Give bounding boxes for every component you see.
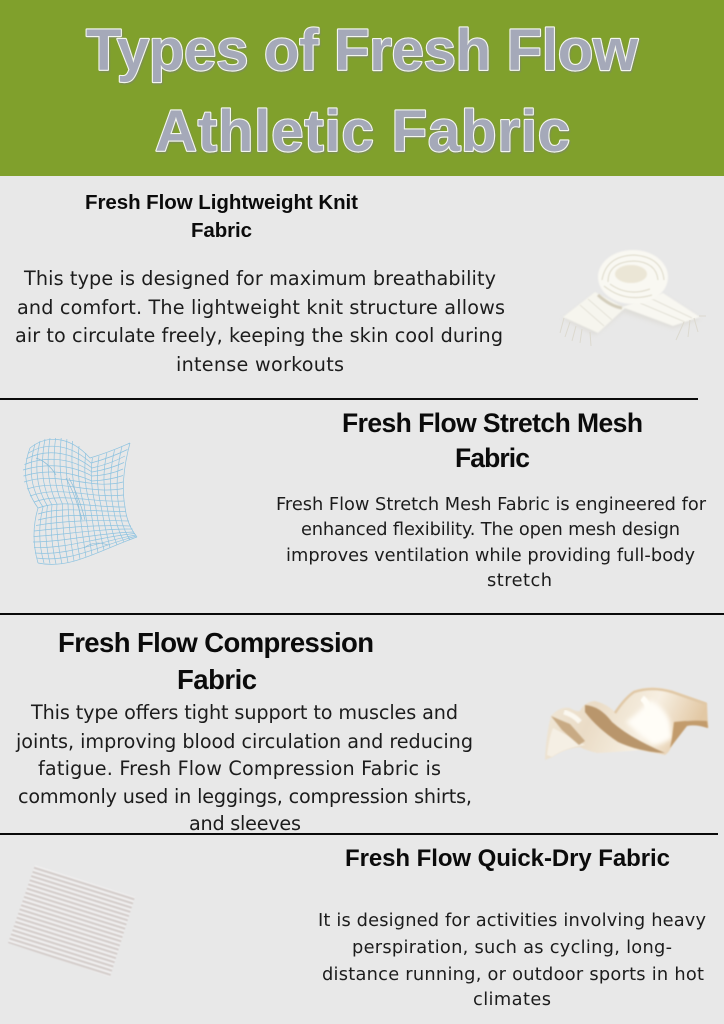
title: Types of Fresh Flow (86, 18, 639, 83)
text: quick-dry description: perspiration, such as cycling, long- (352, 937, 672, 958)
text: compression description (15, 701, 473, 835)
text: lightweight knit description: intense workouts (176, 353, 344, 376)
text: stretch mesh description: Fresh Flow Stretch Mesh Fabric is engineered for (276, 494, 707, 515)
text: quick-dry description: climates (473, 989, 551, 1010)
text: lightweight knit description: This type is designed for maximum breathability (23, 267, 496, 290)
text: lightweight knit description (15, 267, 505, 376)
icon: white knit scarf (560, 250, 706, 346)
divider line 2 (0, 613, 724, 615)
icon: flowing beige silk (545, 688, 708, 760)
panel: compression (15, 627, 708, 835)
divider line 3 (0, 833, 718, 835)
panel: stretch mesh (23, 408, 707, 591)
text: stretch mesh description (276, 494, 707, 591)
divider line 1 (0, 398, 698, 400)
heading: lightweight knit: Fresh Flow Lightweight Knit (85, 191, 358, 214)
heading: stretch mesh (342, 408, 643, 473)
icon: warped blue mesh (23, 438, 137, 564)
icon: checked fabric swatch (8, 865, 135, 977)
text: stretch mesh description: enhanced flexibility. The open mesh design (301, 519, 680, 540)
panel: lightweight knit (15, 191, 706, 376)
panel: quick-dry (8, 845, 706, 1010)
heading: stretch mesh: Fresh Flow Stretch Mesh (342, 408, 643, 438)
text: compression description: joints, improving blood circulation and reducing (15, 730, 473, 753)
heading: lightweight knit: Fabric (191, 219, 252, 242)
title (86, 18, 639, 164)
text: compression description: commonly used in leggings, compression shirts, (18, 785, 472, 808)
heading: stretch mesh: Fabric (455, 443, 530, 473)
text: compression description: This type offers tight support to muscles and (30, 701, 458, 724)
text: lightweight knit description: air to circulate freely, keeping the skin cool during (15, 324, 503, 347)
text: quick-dry description: distance running, or outdoor sports in hot (322, 964, 704, 985)
heading: lightweight knit (85, 191, 358, 242)
text: compression description: fatigue. Fresh Flow Compression Fabric is (38, 757, 441, 780)
text: compression description: and sleeves (189, 812, 301, 835)
text: lightweight knit description: and comfort. The lightweight knit structure allows (17, 296, 505, 319)
heading: compression: Fresh Flow Compression (58, 627, 374, 658)
text: stretch mesh description: improves ventilation while providing full-body (286, 545, 695, 566)
title: Athletic Fabric (155, 99, 570, 164)
text: quick-dry description: It is designed for activities involving heavy (318, 910, 706, 931)
header banner (0, 0, 724, 176)
text: stretch mesh description: stretch (487, 570, 552, 591)
heading: compression: Fabric (177, 664, 257, 695)
heading: quick-dry: Fresh Flow Quick-Dry Fabric (345, 845, 670, 872)
heading: compression (58, 627, 374, 695)
mesh fold accents (36, 458, 108, 548)
text: quick-dry description (318, 910, 706, 1010)
